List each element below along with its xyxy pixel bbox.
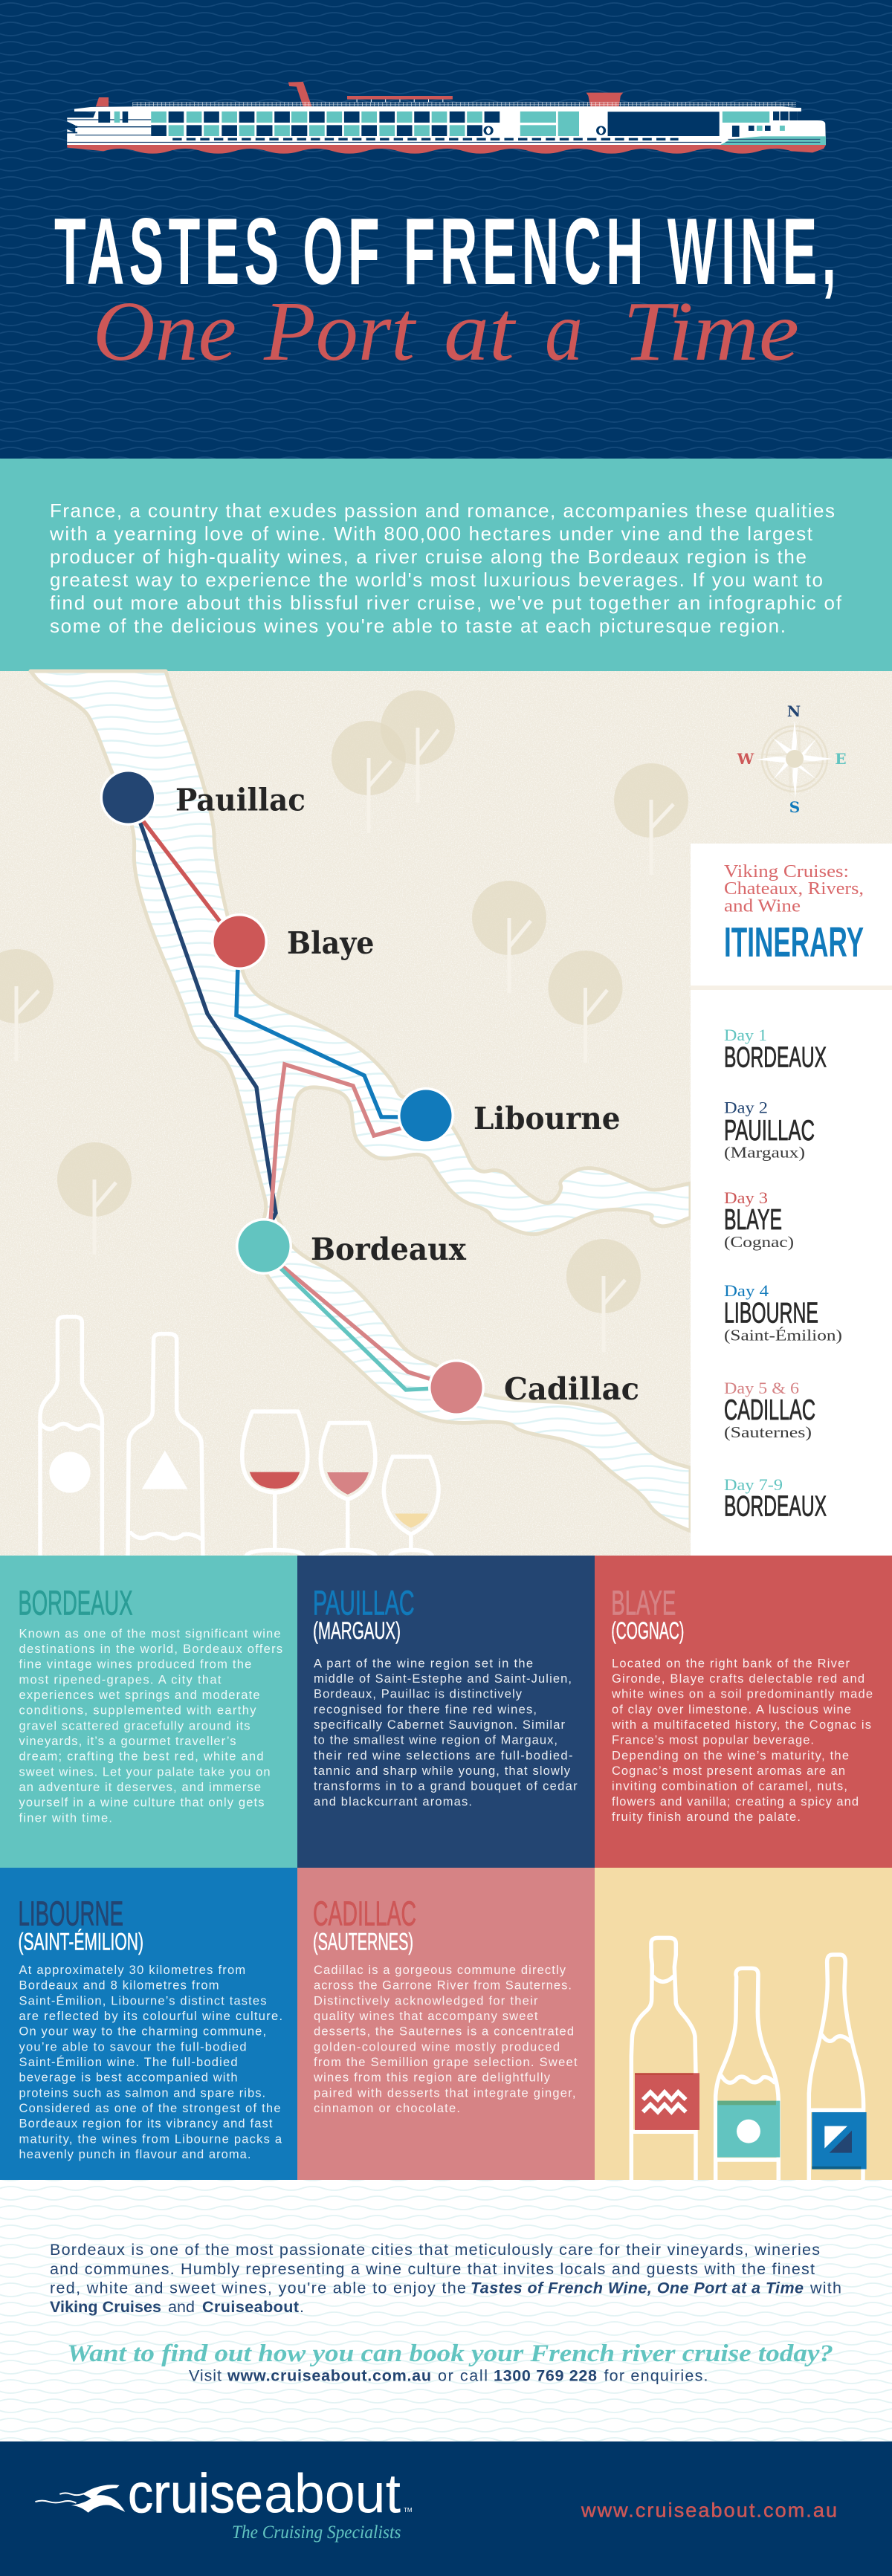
panel: Cadillac: desserts, the Sauternes is a concentrated: [314, 2025, 574, 2039]
closing paragraph: Bordeaux is one of the most passionate cities that meticulously care for their vineyards, wineries: [50, 2241, 820, 2259]
panel: Cadillac: golden-coloured wine mostly produced: [314, 2040, 560, 2054]
panel: Cadillac: from the Semillion grape selection. Sweet: [314, 2056, 578, 2069]
stop: Libourne: Libourne: [474, 1101, 620, 1136]
panel: itinerary: [691, 844, 892, 1556]
panel: Bordeaux: Known as one of the most significant wine: [19, 1627, 281, 1640]
subtitle: One: [93, 284, 236, 378]
day 1: BORDEAUX: [724, 1042, 827, 1074]
website link: www.cruiseabout.com.au: [581, 2499, 837, 2521]
itinerary heading: Chateaux, Rivers,: [724, 879, 864, 899]
panel: Cadillac: Cadillac is a gorgeous commune directly: [314, 1964, 566, 1977]
panel: Libourne: Considered as one of the strongest of the: [19, 2102, 281, 2115]
panel: Libourne: LIBOURNE: [18, 1894, 123, 1933]
icon: bottle with circle label: [716, 1968, 780, 2180]
icon: logo wave: [35, 2485, 125, 2513]
logo: cruiseabout: TM: [404, 2507, 413, 2514]
panel: Libourne: Bordeaux and 8 kilometres from: [19, 1979, 219, 1993]
panel: Bordeaux: BORDEAUX: [18, 1583, 132, 1622]
header panel: [0, 0, 892, 459]
itinerary heading: [724, 862, 864, 966]
river: [30, 671, 691, 1531]
panel: Bordeaux: most ripened-grapes. A city that: [19, 1673, 222, 1686]
day 1: Day 1: [724, 1026, 767, 1044]
icon: bottle with triangle label: [809, 1955, 867, 2180]
day 7 to 9: Day 7-9: [724, 1475, 783, 1494]
panel: Pauillac: A part of the wine region set in the: [314, 1657, 533, 1670]
panel: Pauillac: (MARGAUX): [313, 1617, 401, 1644]
panel: Blaye: of clay over limestone. A luscious wine: [612, 1703, 851, 1716]
panel: Blaye: Depending on the wine’s maturity, the: [612, 1749, 849, 1762]
closing paragraph: with: [809, 2279, 841, 2297]
stop: Blaye: Blaye: [287, 925, 375, 961]
panel: wine bottles: [595, 1868, 892, 2180]
panel: Bordeaux: destinations in the world, Bordeaux offers: [19, 1643, 282, 1656]
closing paragraph: red, white and sweet wines, you're able to enjoy the: [50, 2279, 466, 2297]
closing paragraph: Cruiseabout: [202, 2298, 299, 2316]
closing paragraph: .: [300, 2298, 304, 2316]
panel: Cadillac: quality wines that accompany sweet: [314, 2010, 538, 2023]
panel: Bordeaux: sweet wines. Let your palate take you on: [19, 1765, 271, 1779]
subtitle: a: [545, 284, 583, 378]
panel: Libourne: At approximately 30 kilometres from: [19, 1964, 245, 1977]
panel: route map: [0, 671, 892, 1556]
icon: compass: N: [787, 702, 801, 720]
panel: Pauillac: [297, 1556, 595, 1868]
route lines: [139, 818, 434, 1390]
closing paragraph: Tastes of French Wine, One Port at a Time: [471, 2279, 804, 2297]
panel: Blaye: with a multifaceted history, the Cognac is: [611, 1718, 871, 1732]
logo: cruiseabout: cruise: [128, 2463, 263, 2525]
panel: Blaye: inviting combination of caramel, nuts,: [612, 1780, 847, 1793]
stop: Cadillac: [428, 1359, 639, 1416]
panel: Libourne: On your way to the charming commune,: [19, 2025, 266, 2039]
panel: Cadillac: CADILLAC: [313, 1894, 416, 1933]
panel: Blaye: [595, 1556, 892, 1868]
subtitle: [93, 284, 799, 378]
panel: Pauillac: tannic and sharp while young, that slowly: [314, 1764, 571, 1778]
panel: introduction: greatest way to experience the world's most luxurious beverages. If you want to: [50, 569, 823, 591]
panel: Bordeaux: conditions, supplemented with earthy: [19, 1704, 256, 1718]
panel: Pauillac: their red wine selections are full-bodied-: [314, 1749, 572, 1762]
day 4: Day 4: [724, 1281, 769, 1300]
day 5 and 6: Day 5 & 6: [724, 1379, 799, 1397]
panel: introduction: France, a country that exudes passion and romance, accompanies these qualities: [50, 499, 835, 522]
panel: introduction: producer of high-quality wines, a river cruise along the Bordeaux region is the: [50, 546, 807, 568]
subtitle: at: [444, 284, 516, 378]
stop: Pauillac: [100, 769, 306, 826]
stop: Libourne: [398, 1087, 620, 1144]
panel: Bordeaux: experiences wet springs and moderate: [19, 1689, 260, 1702]
panel: Bordeaux: fine vintage wines produced from the: [19, 1658, 251, 1672]
panel: Cadillac: Distinctively acknowledged for their: [314, 1994, 538, 2007]
footer: [0, 2441, 892, 2576]
panel: introduction: with a yearning love of wine. With 800,000 hectares under vine and the largest: [49, 522, 813, 545]
closing paragraph: and: [168, 2298, 195, 2316]
panel: Pauillac: middle of Saint-Estephe and Saint-Julien,: [314, 1672, 572, 1686]
call to action: Want to find out how you can book your French river cruise today?: [67, 2340, 833, 2367]
closing paragraph: and communes. Humbly representing a wine culture that invites locals and guests with the finest: [50, 2260, 815, 2278]
panel: Blaye: BLAYE: [611, 1583, 676, 1622]
panel: Libourne: maturity, the wines from Libourne packs a: [19, 2132, 282, 2146]
panel: Bordeaux: [0, 1556, 297, 1868]
panel: Libourne: heavenly punch in flavour and aroma.: [19, 2148, 251, 2161]
day 2: (Margaux): [724, 1143, 805, 1161]
icon: compass: [737, 702, 847, 816]
stop: Pauillac: Pauillac: [175, 782, 306, 818]
panel: Blaye: Cognac’s most present aromas are an: [612, 1764, 845, 1778]
panel: Cadillac: [297, 1868, 595, 2180]
closing paragraph: [50, 2241, 841, 2316]
closing paragraph: Viking Cruises: [50, 2298, 161, 2316]
day 3: BLAYE: [724, 1204, 782, 1236]
call to action: www.cruiseabout.com.au: [227, 2366, 431, 2384]
icon: compass: S: [789, 798, 800, 816]
panel: Libourne: Bordeaux region for its vibrancy and fast: [19, 2117, 273, 2131]
icon: bottle with wave label: [631, 1938, 699, 2180]
stop: Bordeaux: Bordeaux: [311, 1232, 467, 1267]
day 5 and 6: CADILLAC: [724, 1394, 815, 1426]
panel: Libourne: (SAINT-ÉMILION): [18, 1928, 143, 1955]
panel: Pauillac: recognised for there fine red wines,: [314, 1703, 537, 1716]
panel: closing text: [0, 2180, 892, 2441]
day 3: (Cognac): [724, 1233, 794, 1251]
panel: Bordeaux: an adventure it deserves, and immerse: [19, 1781, 261, 1794]
panel: Blaye: fruity finish around the palate.: [612, 1810, 801, 1824]
call to action: for enquiries.: [604, 2366, 708, 2384]
day 2: [724, 1098, 815, 1161]
panel: Libourne: Saint-Émilion, Libourne’s distinct tastes: [19, 1993, 266, 2007]
panel: introduction: find out more about this blissful river cruise, we've put together an infographic of: [50, 592, 842, 614]
panel: Pauillac: Bordeaux, Pauillac is distinctively: [314, 1688, 523, 1701]
panel: Blaye: flowers and vanilla; creating a spicy and: [612, 1795, 859, 1808]
stop: Cadillac: Cadillac: [504, 1371, 639, 1407]
panel: introduction: some of the delicious wines you're able to taste at each picturesque region.: [50, 615, 786, 637]
itinerary heading: Viking Cruises:: [724, 862, 849, 881]
day 5 and 6: (Sauternes): [724, 1423, 812, 1441]
panel: Libourne: beverage is best accompanied with: [19, 2071, 238, 2085]
panel: Pauillac: and blackcurrant aromas.: [314, 1795, 472, 1808]
day 1: [724, 1026, 827, 1074]
panel: Blaye: France’s most popular beverage.: [612, 1734, 814, 1747]
day 4: (Saint-Émilion): [724, 1326, 842, 1344]
panel: introduction: [0, 459, 892, 671]
logo: cruiseabout: [35, 2463, 413, 2543]
day 3: [724, 1188, 794, 1251]
day 3: Day 3: [724, 1188, 768, 1207]
panel: Pauillac: transforms in to a grand bouquet of cedar: [314, 1780, 578, 1793]
day 4: [724, 1281, 842, 1344]
panel: Pauillac: specifically Cabernet Sauvignon. Similar: [314, 1718, 565, 1732]
icon: compass: W: [737, 750, 754, 768]
panel: Libourne: Saint-Émilion wine. The full-bodied: [19, 2055, 238, 2069]
logo: cruiseabout: about: [264, 2463, 401, 2525]
call to action: [67, 2340, 833, 2384]
panel: Libourne: proteins such as salmon and spare ribs.: [19, 2086, 265, 2100]
title: TASTES OF FRENCH WINE,: [54, 198, 836, 304]
trees: [0, 690, 688, 1352]
stop: Blaye: [211, 913, 375, 970]
icon: compass: E: [835, 750, 847, 768]
subtitle: Time: [623, 284, 799, 378]
panel: Cadillac: cinnamon or chocolate.: [314, 2102, 460, 2115]
panel: Cadillac: paired with desserts that integrate ginger,: [314, 2086, 575, 2100]
panel: Cadillac: (SAUTERNES): [313, 1928, 413, 1955]
icon: river cruise ship: [67, 82, 826, 154]
panel: Libourne: you’re able to savour the full-bodied: [19, 2040, 247, 2054]
panel: Bordeaux: gravel scattered gracefully around its: [19, 1719, 250, 1732]
icon: bottles and glasses: [40, 1317, 439, 1555]
day 5 and 6: [724, 1379, 815, 1441]
panel: Libourne: [0, 1868, 297, 2180]
day 7 to 9: [724, 1475, 827, 1523]
call to action: 1300 769 228: [494, 2366, 597, 2384]
day 7 to 9: BORDEAUX: [724, 1491, 827, 1523]
panel: Blaye: Gironde, Blaye crafts delectable red and: [612, 1672, 864, 1686]
panel: Bordeaux: yourself in a wine culture that only gets: [19, 1796, 265, 1810]
day 2: PAUILLAC: [724, 1115, 815, 1147]
panel: Cadillac: wines from this region are delightfully: [313, 2071, 551, 2085]
panel: Blaye: (COGNAC): [611, 1617, 684, 1644]
panel: Bordeaux: vineyards, it’s a gourmet traveller’s: [19, 1735, 236, 1748]
logo: cruiseabout: The Cruising Specialists: [232, 2522, 401, 2543]
panel: Blaye: Located on the right bank of the River: [612, 1657, 850, 1670]
itinerary heading: and Wine: [724, 896, 801, 916]
panel: Pauillac: PAUILLAC: [313, 1583, 415, 1622]
subtitle: Port: [263, 284, 416, 378]
panel: Pauillac: to the smallest wine region of Margaux,: [314, 1734, 558, 1747]
panel: Bordeaux: finer with time.: [19, 1811, 112, 1825]
panel: Bordeaux: dream; crafting the best red, white and: [19, 1750, 263, 1764]
day 2: Day 2: [724, 1098, 768, 1117]
panel: Libourne: are reflected by its colourful wine culture.: [19, 2010, 282, 2023]
day 4: LIBOURNE: [724, 1297, 818, 1329]
call to action: or call: [438, 2366, 488, 2384]
panel: Blaye: white wines on a soil predominantly made: [611, 1688, 873, 1701]
call to action: Visit: [189, 2366, 222, 2384]
stop: Bordeaux: [236, 1218, 467, 1275]
panel: Cadillac: across the Garrone River from Sauternes.: [314, 1979, 572, 1993]
